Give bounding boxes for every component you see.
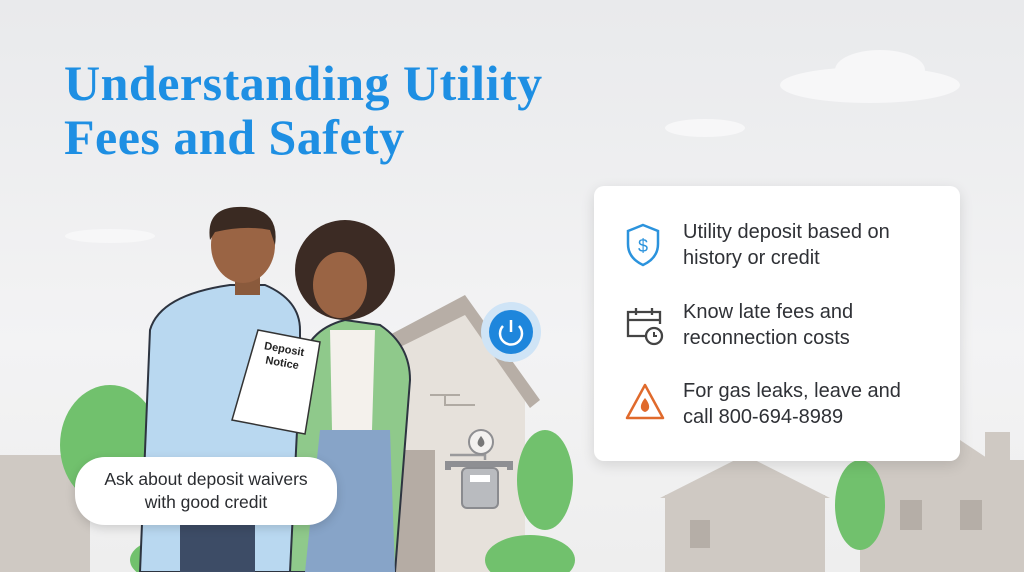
text: gas leaks: [683, 380, 901, 428]
text: deposit: history or credit: [683, 247, 820, 269]
trees: [60, 385, 885, 572]
text: late fees: Know late fees and: [683, 301, 853, 323]
text: deposit: Utility deposit based on: [683, 221, 890, 243]
man: [140, 207, 300, 572]
icon: shield dollar: $: [638, 236, 648, 256]
icon: shield dollar: [626, 224, 660, 266]
text: deposit: [683, 221, 890, 269]
title: Fees and Safety: [64, 109, 405, 165]
text: late fees: reconnection costs: [683, 327, 850, 349]
deposit notice: Deposit: [263, 340, 305, 359]
deposit notice: Notice: [265, 355, 300, 372]
clouds: [65, 50, 960, 243]
icon: gas warning: [626, 384, 664, 420]
panel: tips card: [594, 186, 960, 461]
text: gas leaks: For gas leaks, leave and: [683, 380, 901, 402]
text: late fees: [683, 301, 853, 349]
house: [380, 295, 540, 572]
callout: deposit waivers: Ask about deposit waivers: [104, 469, 308, 489]
woman: [290, 220, 410, 572]
icon: calendar clock: [626, 308, 664, 346]
callout: deposit waivers: [75, 457, 337, 525]
power icon: [481, 302, 541, 362]
callout: deposit waivers: with good credit: [145, 492, 267, 512]
background houses: [0, 420, 1024, 572]
deposit notice: [232, 330, 320, 434]
title: Understanding Utility: [64, 55, 543, 111]
title: [64, 55, 543, 165]
text: gas leaks: call 800-694-8989: [683, 406, 843, 428]
